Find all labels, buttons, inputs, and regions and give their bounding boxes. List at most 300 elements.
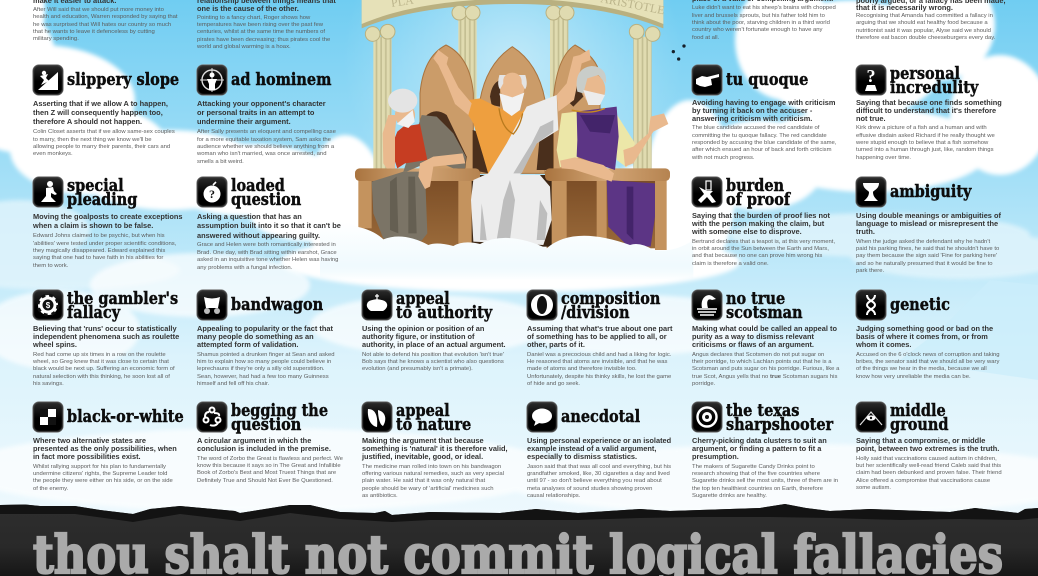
heading: loaded <box>231 176 285 196</box>
example: health and education, Warren responded by saying that <box>33 14 178 20</box>
example <box>197 456 343 485</box>
definition: Saying that the burden of proof lies not <box>692 211 830 220</box>
definition: Cherry-picking data clusters to suit an <box>692 436 827 445</box>
heading: special <box>67 176 124 196</box>
heading: begging the <box>231 401 328 421</box>
definition: example instead of a valid argument, <box>527 444 656 453</box>
example: Angus declares that Scotsmen do not put sugar on <box>692 352 824 358</box>
example: know this because it says so in The Great and Infallible <box>197 463 341 469</box>
definition: Assuming that what's true about one part <box>527 324 672 333</box>
icon: loch ness monster <box>692 290 722 320</box>
definition: then Z will consequently happen too, <box>33 108 163 117</box>
heading: bandwagon <box>231 295 323 315</box>
example: effusive disdain asked Richard if he really thought we <box>856 133 995 139</box>
definition <box>527 325 672 349</box>
text <box>527 437 671 500</box>
icon: crown <box>362 290 392 320</box>
example: wheel, so Greg knew that it was close to certain that <box>33 359 169 365</box>
example <box>692 125 836 161</box>
definition: especially to dismiss statistics. <box>527 452 637 461</box>
heading: of proof <box>726 190 790 210</box>
heading: genetic <box>890 295 950 315</box>
fallacy: the gambler's fallacy <box>33 290 193 400</box>
example: liver and brussels sprouts, but his father told him to <box>692 13 825 19</box>
example: meta analyses of sound studies showing proven <box>527 486 652 492</box>
definition: authority figure, or institution of <box>362 332 474 341</box>
example <box>692 464 838 500</box>
text <box>33 212 182 269</box>
example: Daniel was a precocious child and had a liking for logic. <box>527 352 671 358</box>
example: their porridge, to which Lachlan points out that he is a <box>692 359 832 365</box>
definition: not true. <box>856 114 886 123</box>
heading: the texas <box>726 401 799 421</box>
text <box>362 437 508 500</box>
example: world and global warming is a hoax. <box>197 44 291 50</box>
definition: whom it comes. <box>856 340 911 349</box>
definition: argument, or finding a pattern to fit a <box>692 444 821 453</box>
definition: that it is necessarily wrong. <box>856 2 953 12</box>
definition: purity as a way to dismiss relevant <box>692 332 814 341</box>
heading: pleading <box>67 190 137 210</box>
example <box>33 129 175 157</box>
example <box>197 352 335 388</box>
definition: Moving the goalposts to create exceptions <box>33 212 182 221</box>
example: The word of Zorbo the Great is flawless and perfect. We <box>197 456 343 462</box>
heading: to nature <box>396 415 471 435</box>
fallacy: bandwagon <box>197 290 357 400</box>
fallacy: slippery slope <box>32 64 179 157</box>
heading: ground <box>890 415 948 435</box>
example: Bob says that he knows a scientist who also questions <box>362 359 504 365</box>
heading <box>231 404 328 432</box>
heading: ad hominem <box>231 70 331 90</box>
heading <box>396 404 471 432</box>
definition <box>856 98 1002 123</box>
example <box>856 352 1000 381</box>
right philosopher: purple robe, cream sleeves <box>557 66 668 247</box>
text <box>856 98 1002 161</box>
example: woman who isn't married, was once arrested, and <box>197 151 326 157</box>
heading: no true <box>726 289 785 309</box>
text <box>692 325 839 388</box>
definition: in fact more possibilities exist. <box>33 452 141 461</box>
example <box>362 464 508 500</box>
example: leprechauns if they're only a silly old superstition. <box>197 366 325 372</box>
icon: bomb with question mark: ? <box>209 187 215 201</box>
example <box>527 464 671 500</box>
example: 'abilities' were tested under proper scientific conditions, <box>33 240 176 246</box>
top fallacy: the fallacy fallacy (cut off) <box>856 0 1006 41</box>
heading: /division <box>561 303 630 323</box>
definition: authority, in place of an actual argument. <box>362 340 506 349</box>
definition: language to mislead or misrepresent the <box>856 219 998 228</box>
definition <box>362 325 506 349</box>
example: Not able to defend his position that evolution 'isn't true' <box>362 352 504 358</box>
definition: Using double meanings or ambiguities of <box>856 211 1001 220</box>
example: After Sally presents an eloquent and compelling case <box>197 129 336 135</box>
fallacy: ad hominem <box>196 64 336 165</box>
column capitals <box>365 5 660 41</box>
text <box>692 437 838 500</box>
example <box>856 456 1002 492</box>
fallacy: ambiguity <box>856 177 1016 287</box>
definition: one is the cause of the other. <box>197 4 299 13</box>
definition <box>362 437 508 461</box>
example: saying that one had to have faith in his abilities for <box>33 255 163 261</box>
definition: Believing that 'runs' occur to statistically <box>33 324 177 333</box>
example: to marry, then the next thing we know we'll be <box>33 137 152 143</box>
example: that he wants to leave it defenceless by cutting <box>33 29 155 35</box>
example: claim is therefore a valid one. <box>692 261 769 267</box>
definition: criticisms or flaws of an argument. <box>692 340 814 349</box>
example: undermine citizens' rights, the Supreme Leader told <box>33 471 167 477</box>
heading: tu quoque <box>726 70 808 90</box>
central cloud bed <box>305 135 385 275</box>
fallacy: personal incredulity <box>855 64 1002 161</box>
definition: when a claim is shown to be false. <box>33 221 153 230</box>
right upper cloud <box>735 0 835 100</box>
example: The makers of Sugarette Candy Drinks point to <box>692 464 815 470</box>
example: him to explain how so many people could believe in <box>197 359 331 365</box>
heading <box>561 292 660 320</box>
heading: the gambler's <box>67 289 178 309</box>
definition: difficult to understand that it's therefore <box>856 106 996 115</box>
text <box>527 325 672 388</box>
example: After Will said that we should put more money into <box>33 7 164 13</box>
definition: by turning it back on the accuser - <box>692 106 812 115</box>
example: When the judge asked the defendant why he hadn't <box>856 238 990 244</box>
text <box>33 437 177 493</box>
definition <box>856 212 1001 236</box>
fallacy: composition/division <box>527 290 687 400</box>
example: with not much progress. <box>692 155 755 161</box>
example: made of atoms and therefore invisible too. <box>527 366 637 372</box>
example: they magically disappeared. Edward explained this <box>33 248 165 254</box>
icon: triangle with eye <box>856 402 886 432</box>
definition: Making what could be called an appeal to <box>692 324 837 333</box>
text <box>197 212 341 271</box>
fallacy: the texas sharpshooter <box>692 402 852 512</box>
fallacy: middle ground <box>856 402 1016 512</box>
example: research showing that of the five countries where <box>692 471 820 477</box>
example: true Scot, Angus yells that no true Scotsman sugars his <box>692 374 837 380</box>
definition <box>33 212 182 230</box>
flies <box>672 44 686 61</box>
definition: undermine their argument. <box>197 117 291 126</box>
heading: ambiguity <box>890 182 971 202</box>
example <box>692 5 836 41</box>
example: military spending. <box>33 36 79 42</box>
definition: of something has to be applied to all, or <box>527 332 667 341</box>
definition <box>197 0 336 13</box>
icon: crosshair over figure <box>197 65 227 95</box>
heading: incredulity <box>890 78 978 98</box>
heading <box>231 176 302 210</box>
fallacy: black-or-white <box>33 402 193 512</box>
example: some autism. <box>856 485 891 491</box>
fallacy: genetic <box>856 290 1016 400</box>
heading <box>726 292 803 320</box>
example: Red had come up six times in a row on the roulette <box>33 352 166 358</box>
fallacy: burden of proof <box>691 176 835 267</box>
heading: appeal <box>396 289 450 309</box>
heading: question <box>231 190 301 210</box>
fallacy: tu quoque <box>691 64 836 161</box>
definition <box>197 99 326 126</box>
example: know how very unreliable the media can be. <box>856 374 971 380</box>
example <box>692 352 839 388</box>
definition: Asking a question that has an <box>197 212 302 221</box>
definition <box>197 437 343 453</box>
example: paid his parking fines, he said that he shouldn't have to <box>856 246 999 252</box>
definition: A circular argument in which the <box>197 436 311 445</box>
example: Pointing to a fancy chart, Roger shows how <box>197 15 310 21</box>
example <box>527 352 672 388</box>
definition <box>692 325 839 349</box>
definition <box>33 437 177 461</box>
icon: leaves <box>362 402 392 432</box>
definition <box>692 437 838 461</box>
definition: assumption built into it so that it can't be <box>197 221 341 230</box>
example: Sugarette drinks sell the most units, three of them are in <box>692 478 838 484</box>
definition: presumption. <box>692 452 739 461</box>
example: bribes, the senator said that we should all be very wary <box>856 359 999 365</box>
example: asked in an inquisitive tone whether Helen was having <box>197 257 338 263</box>
example: even monkeys. <box>33 151 73 157</box>
example: of the enemy. <box>33 486 68 492</box>
icon: falling figure on slope <box>33 65 63 95</box>
definition: Saying that because one finds something <box>856 98 1002 107</box>
example: Unfortunately, despite his thinky skills, he lost the game <box>527 374 671 380</box>
top fallacy: appeal to emotion (cut off) <box>692 0 836 41</box>
example: Shamus pointed a drunken finger at Sean and asked <box>197 352 335 358</box>
example: causal relationships. <box>527 493 580 499</box>
icon: pointing hand <box>692 65 722 95</box>
definition: attempted form of validation. <box>197 340 298 349</box>
heading: composition <box>561 289 660 309</box>
definition: Making the argument that because <box>362 436 484 445</box>
definition: Saying that a compromise, or middle <box>856 436 985 445</box>
text <box>692 98 836 161</box>
icon: question mark over figure: ? <box>866 66 876 86</box>
example: Alice offered a compromise that vaccinations cause <box>856 478 990 484</box>
example: temperatures have been rising over the past few <box>197 22 323 28</box>
definition <box>856 325 1000 349</box>
example: Sugarette drinks are healthy. <box>692 493 767 499</box>
example <box>33 233 176 269</box>
top fallacy: strawman (cut off) <box>33 0 178 42</box>
definition <box>197 212 341 240</box>
fallacy: loaded question <box>196 176 341 271</box>
definition <box>33 325 179 349</box>
fallacy: anecdotal <box>527 402 687 512</box>
definition: Judging something good or bad on the <box>856 324 993 333</box>
left upper cloud <box>0 0 45 65</box>
example: The blue candidate accused the red candidate of <box>692 125 819 131</box>
definition: Asserting that if we allow A to happen, <box>33 99 168 108</box>
example: Sean, however, had had a few too many Guinness <box>197 374 329 380</box>
icon: speech bubble <box>527 402 557 432</box>
example: after which ensued an hour of back and forth criticism <box>692 147 831 153</box>
heading: personal <box>890 64 960 84</box>
definition: Using the opinion or position of an <box>362 324 484 333</box>
definition: or personal traits in an attempt to <box>197 108 314 117</box>
example: the top ten healthiest countries on Earth, therefore <box>692 486 823 492</box>
example: Luke didn't want to eat his sheep's brains with chopped <box>692 5 836 11</box>
throne backs <box>420 45 600 173</box>
example: Accused on the 6 o'clock news of corruption and taking <box>856 352 1000 358</box>
definition <box>692 212 835 236</box>
example: country who weren't fortunate enough to have any <box>692 27 822 33</box>
definition <box>197 325 335 349</box>
example: food at all. <box>692 35 719 41</box>
definition <box>527 437 671 461</box>
example: smells a bit weird. <box>197 159 244 165</box>
icon: kneeling figure <box>33 177 63 207</box>
heading: sharpshooter <box>726 415 833 435</box>
text <box>856 212 1001 275</box>
example <box>197 242 338 271</box>
example: Scotsman and puts sugar on his porridge. Furious, like a <box>692 366 839 372</box>
example: Jason said that that was all cool and everything, but his <box>527 464 671 470</box>
definition <box>856 437 1002 453</box>
example <box>856 238 1001 275</box>
example: people should be wary of 'artificial' medicines such <box>362 486 494 492</box>
definition: other, parts of it. <box>527 340 585 349</box>
example: turned into a human through just, like, random things <box>856 147 994 153</box>
example: The medicine man rolled into town on his bandwagon <box>362 464 501 470</box>
definition: many people do something as an <box>197 332 314 341</box>
icon: circular triskele <box>197 402 227 432</box>
definition <box>33 99 168 126</box>
example: park there. <box>856 268 884 274</box>
example: of hide and go seek. <box>527 381 580 387</box>
definition: something is 'natural' it is therefore valid, <box>362 444 508 453</box>
definition <box>692 98 835 123</box>
heading <box>67 292 178 320</box>
example <box>856 125 995 161</box>
heading <box>890 404 948 432</box>
text <box>856 325 1000 381</box>
example: and that because no one can prove him wrong his <box>692 253 822 259</box>
example: Colin Closet asserts that if we allow same-sex couples <box>33 129 175 135</box>
example: responded by accusing the blue candidate of the same, <box>692 140 836 146</box>
definition: therefore A should not happen. <box>33 117 142 126</box>
example: claim had been debunked and proven false. Their friend <box>856 470 1002 476</box>
example: for a more equitable taxation system, Sam asks the <box>197 137 331 143</box>
heading <box>396 292 492 320</box>
definition: Avoiding having to engage with criticism <box>692 98 835 107</box>
example: arguing that we should eat healthy food because a <box>856 20 988 26</box>
heading: fallacy <box>67 303 120 323</box>
text <box>692 211 835 267</box>
icon: checker squares <box>33 402 63 432</box>
top fallacy: false cause (cut off) <box>197 0 336 50</box>
text <box>197 99 336 165</box>
definition: justified, inevitable, good, or ideal. <box>362 452 483 461</box>
example: were stupid enough to believe that a fish somehow <box>856 140 988 146</box>
heading: question <box>231 415 301 435</box>
icon: bomb with question mark <box>197 177 227 207</box>
example: any problems with a fungal infection. <box>197 265 292 271</box>
icon: casino chip <box>33 290 63 320</box>
definition: Using personal experience or an isolated <box>527 436 671 445</box>
icon: target <box>692 402 722 432</box>
example: he was surprised that Will hates our country so much <box>33 22 171 28</box>
columns <box>373 17 652 170</box>
example: committing the tu quoque fallacy. The red candidate <box>692 133 827 139</box>
definition <box>856 0 1006 12</box>
example: as antibiotics. <box>362 493 398 499</box>
example: He reasoned that atoms are invisible, and that he was <box>527 359 667 365</box>
example: but her scientifically well-read friend Caleb said that this <box>856 463 1001 469</box>
fallacy: special pleading <box>32 176 182 269</box>
text <box>197 325 335 388</box>
text <box>362 325 506 374</box>
example: think about the poor, starving children in a third world <box>692 20 830 26</box>
example: Book of Zorbo's Best and Most Truest Things that are <box>197 470 336 476</box>
definition: basis of where it comes from, or from <box>856 332 988 341</box>
example: Holly said that vaccinations caused autism in children, <box>856 456 997 462</box>
example: black would be next up. Suffering an economic form of <box>33 366 175 372</box>
example: Recognising that Amanda had committed a fallacy in <box>856 13 993 19</box>
heading: black-or-white <box>67 407 184 427</box>
example: offering various natural remedies, such as very special <box>362 471 504 477</box>
heading: scotsman <box>726 303 803 323</box>
definition: presented as the only possibilities, when <box>33 444 177 453</box>
heading <box>67 176 138 210</box>
centre philosopher: orange tunic, white robe <box>433 49 591 245</box>
example: and so he naturally presumed that it would be fine to <box>856 261 993 267</box>
cloud bed <box>320 221 693 280</box>
heading: anecdotal <box>561 407 640 427</box>
definition: with the person making the claim, but <box>692 219 824 228</box>
example: in orbit around the Sun between the Earth and Mars, <box>692 246 829 252</box>
text <box>197 437 343 485</box>
example: allowing people to marry their parents, their cars and <box>33 144 170 150</box>
example <box>197 15 330 50</box>
definition: Appealing to popularity or the fact that <box>197 324 333 333</box>
fallacy: begging the question <box>197 402 357 512</box>
example: himself and fell off his chair. <box>197 381 269 387</box>
definition: Where two alternative states are <box>33 436 146 445</box>
heading <box>726 404 833 432</box>
example <box>692 238 835 268</box>
example: pirates have been decreasing; thus pirates cool the <box>197 37 330 43</box>
icon: split oval <box>527 290 557 320</box>
definition: conclusion is included in the premise. <box>197 444 331 453</box>
example: nutritionist said it was popular, Alyse said we should <box>856 28 991 34</box>
example: Brad. One day, with Brad sitting within earshot, Grace <box>197 250 337 256</box>
definition: answered without appearing guilty. <box>197 231 320 240</box>
arch with inscription <box>362 0 666 28</box>
throne seats and arms <box>355 168 670 250</box>
example: happening over time. <box>856 155 911 161</box>
example: Whilst rallying support for his plan to fundamentally <box>33 464 166 470</box>
example <box>33 352 179 388</box>
heading: burden <box>726 176 784 196</box>
definition: independent phenomena such as roulette <box>33 332 179 341</box>
example: evolution (and presumably isn't a primate). <box>362 366 473 372</box>
text <box>33 99 175 157</box>
example: centuries, whilst at the same time the numbers of <box>197 29 325 35</box>
example: Edward Johns claimed to be psychic, but when his <box>33 233 165 239</box>
fallacy: appeal to nature <box>362 402 522 512</box>
example: of the things we hear in the media, because we all <box>856 366 987 372</box>
heading <box>890 64 979 98</box>
heading: slippery slope <box>67 70 179 90</box>
heading: to authority <box>396 303 492 323</box>
